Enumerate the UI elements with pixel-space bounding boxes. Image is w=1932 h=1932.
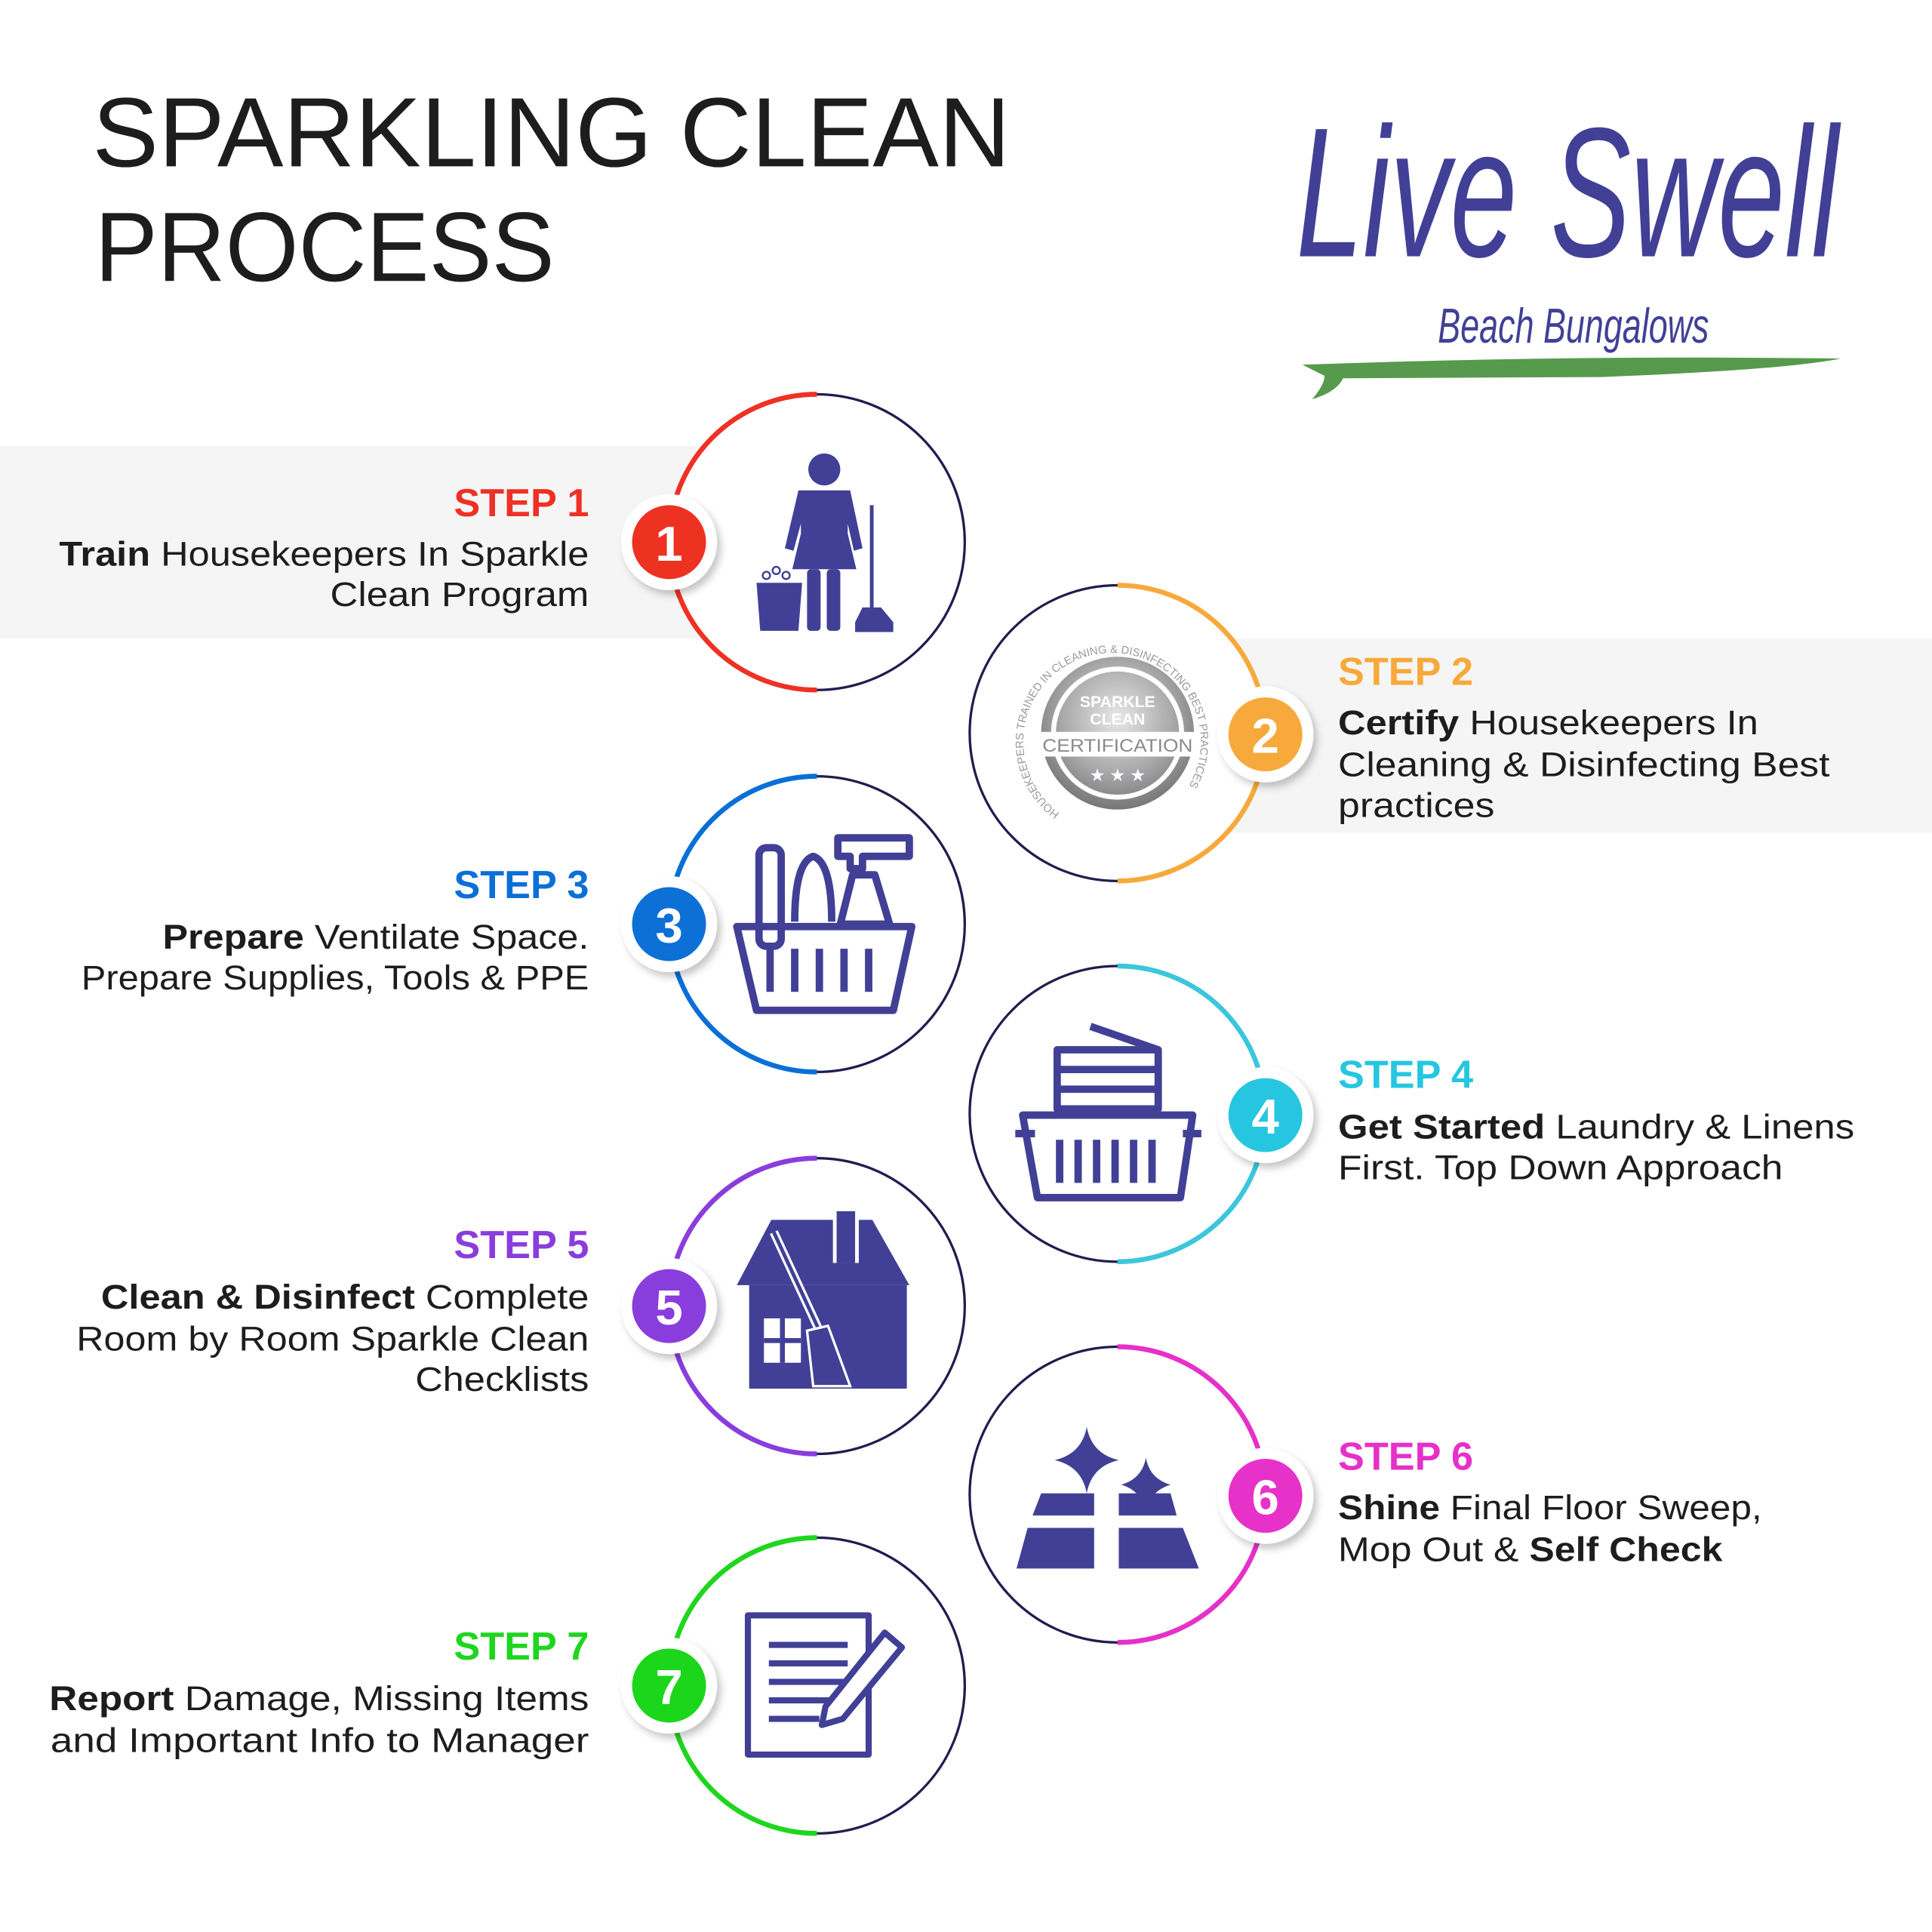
text: step 5: Room by Room Sparkle Clean [76,1319,589,1358]
text: step 4: Get Started Laundry & Linens [1338,1108,1854,1146]
badge 3: 3 [655,898,683,953]
badge 1 [621,494,717,590]
text: step 6: Shine Final Floor Sweep, [1338,1488,1762,1527]
text: step 2 [1338,651,1830,824]
icon: housekeeper [756,454,894,632]
badge 3 [621,876,717,972]
text: step 2: STEP 2 [1338,651,1473,694]
icon: certification seal: SPARKLE [1080,694,1155,711]
text: step 7 [49,1625,589,1760]
text: step 2: Certify Housekeepers In [1338,703,1758,742]
step 6 circle [970,1346,1313,1642]
text: step 1: Train Housekeepers In Sparkle [59,534,589,573]
text: step 4: First. Top Down Approach [1338,1148,1783,1186]
badge 6: 6 [1252,1470,1279,1525]
step 2 circle [968,583,1321,884]
step 5 circle [621,1158,964,1454]
text: step 3: Prepare Ventilate Space. [163,918,589,956]
text: step 3 [82,863,589,997]
icon: house with mop [737,1208,909,1389]
badge 5: 5 [655,1280,683,1335]
text: step 2: Cleaning & Disinfecting Best [1338,746,1830,784]
text: step 5: Clean & Disinfect Complete [101,1278,589,1316]
text: step 5: Checklists [415,1360,589,1398]
text: step 5 [76,1223,589,1398]
text: step 6: Mop Out & Self Check [1338,1531,1723,1569]
text: step 3: STEP 3 [454,863,589,907]
text: step 7: and Important Info to Manager [51,1721,589,1760]
icon: laundry basket [1015,1026,1201,1198]
step 4 circle [970,966,1313,1262]
badge 5 [621,1258,717,1354]
title [92,77,1011,302]
text: step 7: Report Damage, Missing Items [49,1679,589,1718]
text: step 2: practices [1338,786,1494,824]
logo: Live Swell Beach Bungalows: Beach Bungalows [1438,298,1709,353]
badge 7: 7 [655,1660,683,1715]
step 7 circle [621,1538,964,1833]
title: SPARKLING CLEAN [92,77,1011,187]
step 1 circle [621,394,964,690]
text: step 1: STEP 1 [454,481,589,525]
icon: shiny floor [1017,1427,1199,1568]
badge 2: 2 [1252,709,1279,764]
background band: step 2 [1183,638,1932,833]
badge 4: 4 [1252,1089,1279,1144]
text: step 4 [1338,1054,1854,1186]
badge 4 [1217,1067,1313,1163]
text: step 5: STEP 5 [454,1223,589,1267]
badge 7 [621,1638,717,1734]
title: PROCESS [95,192,555,302]
icon: certification seal: ★ ★ ★ [1090,765,1146,785]
text: step 7: STEP 7 [454,1625,589,1669]
icon: certification seal: CLEAN [1090,711,1145,728]
icon: certification seal: CERTIFICATION [1042,736,1192,756]
badge 1: 1 [655,516,683,571]
background band: step 1 [0,446,740,638]
step 3 circle [621,777,964,1072]
text: step 1: Clean Program [331,575,589,614]
icon: certification seal: HOUSEKEEPERS TRAINED IN CLEANING & DISINFECTING BEST PRACTICES [1016,645,1209,819]
logo: Live Swell Beach Bungalows [1297,89,1841,399]
text: step 6: STEP 6 [1338,1435,1473,1479]
text: step 3: Prepare Supplies, Tools & PPE [82,958,589,997]
text: step 6 [1338,1435,1762,1569]
badge 6 [1217,1447,1313,1544]
icon: report document [748,1615,902,1755]
text: step 1 [59,481,589,614]
icon: supplies basket [737,838,912,1011]
text: step 4: STEP 4 [1338,1054,1473,1097]
badge 2 [1217,686,1313,783]
